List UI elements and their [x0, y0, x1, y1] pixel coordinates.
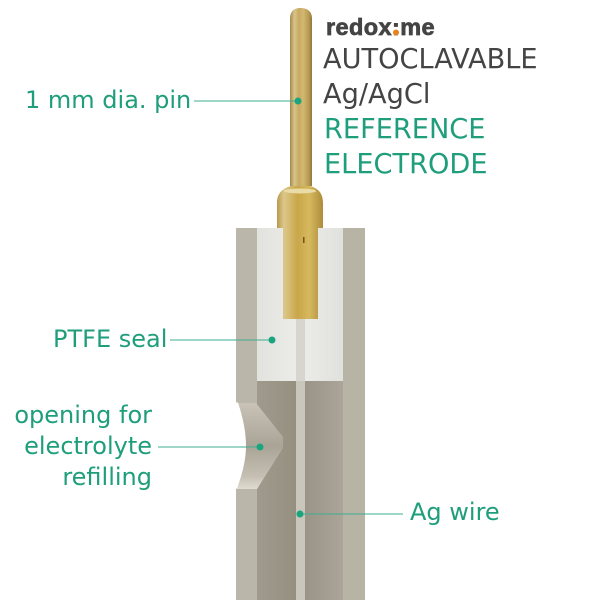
callout: 1 mm dia. pin	[25, 86, 302, 114]
title	[323, 44, 538, 180]
title: AUTOCLAVABLE	[323, 44, 538, 75]
PTFE seal	[257, 228, 343, 381]
callout: opening for electrolyte refilling	[14, 401, 264, 491]
gold pin	[277, 8, 323, 319]
title: ELECTRODE	[324, 149, 488, 180]
notch cut-out	[235, 402, 246, 488]
callout: opening for electrolyte refilling: refilling	[62, 463, 152, 491]
callout: Ag wire: Ag wire	[410, 498, 500, 526]
title: Ag/AgCl	[323, 79, 430, 110]
electrode body	[235, 228, 365, 600]
callout: opening for electrolyte refilling: electrolyte	[24, 432, 152, 460]
callout: Ag wire	[296, 498, 500, 526]
callout: 1 mm dia. pin: 1 mm dia. pin	[25, 86, 191, 114]
refill opening	[236, 403, 283, 489]
pin collar	[277, 186, 323, 319]
Ag wire	[296, 319, 305, 600]
callout: PTFE seal	[53, 325, 276, 353]
callout: PTFE seal: PTFE seal	[53, 325, 167, 353]
callout: opening for electrolyte refilling: opening for	[14, 401, 152, 429]
title: REFERENCE	[324, 114, 485, 145]
electrolyte cavity	[257, 381, 343, 600]
logo: redox.me: redox:me	[326, 14, 435, 40]
